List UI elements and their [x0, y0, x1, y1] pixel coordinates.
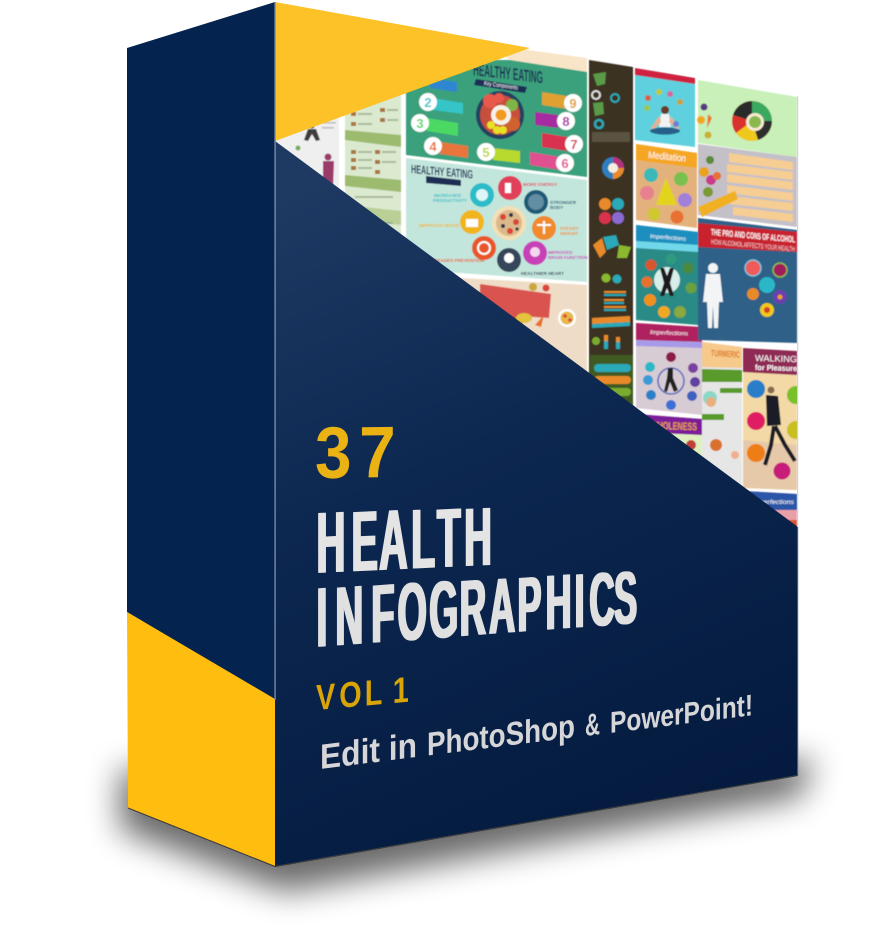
benefit labels: IMPROVED	[548, 250, 573, 255]
subtitle: PhotoShop	[427, 708, 575, 764]
number badges: 6	[561, 156, 569, 171]
panel: fitness sheet	[276, 118, 339, 188]
benefit labels: MORE ENERGY	[523, 182, 557, 187]
subtitle: PowerPoint!	[610, 689, 753, 740]
benefit labels: HEALTHIER HEART	[521, 271, 564, 276]
subtitle: Edit in	[320, 726, 417, 777]
panel: imperfections blue	[748, 490, 797, 526]
panel: food list sheet	[344, 95, 402, 234]
panel: imperfections teal: Imperfections	[650, 234, 686, 243]
number badges: 3	[416, 116, 424, 131]
panel: meditation yoga	[636, 144, 697, 228]
heading: INFOGRAPHICS: P	[518, 559, 541, 649]
heading: HEALTH	[317, 488, 492, 592]
heading: INFOGRAPHICS: I	[317, 570, 327, 666]
benefit labels: STRONGER	[550, 200, 577, 205]
volume label: 1	[393, 669, 409, 711]
body silhouette	[703, 263, 723, 328]
panel: meditation yoga: Meditation	[648, 150, 686, 165]
heading: INFOGRAPHICS: C	[589, 555, 615, 643]
organ icons	[745, 260, 787, 317]
heading: INFOGRAPHICS: I	[575, 557, 584, 644]
panel: healthy eating key components	[406, 60, 587, 177]
pizza	[492, 206, 526, 240]
heading: INFOGRAPHICS: S	[614, 556, 637, 641]
navy front panel	[275, 141, 798, 866]
panel: turmeric	[702, 342, 742, 490]
label tabs	[427, 78, 567, 170]
benefit labels: DISEASES PREVENTION	[430, 258, 485, 263]
subtitle	[320, 689, 753, 777]
panel: imperfections lavender	[636, 323, 702, 415]
bars	[590, 291, 633, 405]
benefit labels: INCREASED	[434, 193, 462, 198]
walking person	[765, 386, 795, 465]
heading: THE PRO AND CONS OF ALCOHOL	[711, 227, 795, 245]
meditating figure	[650, 106, 680, 135]
benefit labels: IMPROVED MOOD	[419, 223, 460, 228]
panel: wholeness: WHOLENESS	[651, 420, 697, 433]
quadrant icons	[599, 198, 624, 224]
heading: INFOGRAPHICS: F	[371, 565, 395, 661]
panel: healthy eating key components: HEALTHY EATING	[473, 60, 543, 87]
panel: dark vertical infographic	[589, 60, 633, 440]
number badges: 5	[482, 145, 490, 160]
panel: turmeric: TURMERIC	[711, 348, 740, 360]
food bowl	[476, 91, 524, 139]
panel: meditation benefits	[635, 68, 695, 147]
panel: walking for pleasure: WALKING	[755, 353, 797, 364]
heading: INFOGRAPHICS: H	[546, 557, 572, 646]
benefit labels: BODY	[550, 205, 563, 210]
volume label: VOL	[316, 671, 382, 718]
number badges: 8	[562, 114, 570, 129]
wheel chart	[602, 157, 624, 179]
panel: walking for pleasure	[742, 347, 797, 490]
number badges: 2	[424, 95, 432, 110]
heading: INFOGRAPHICS: R	[460, 564, 486, 654]
panel: healthy eating right way	[406, 158, 588, 282]
yellow top triangle	[275, 2, 530, 141]
benefit icons	[460, 176, 556, 272]
benefit labels	[419, 182, 588, 276]
heading: HEALTH: H	[464, 490, 492, 584]
panel: healthy eating key components: Key Components	[484, 81, 518, 92]
drop shadow under box	[120, 760, 815, 892]
heading: INFOGRAPHICS: N	[335, 568, 363, 664]
benefit labels: WEIGHT	[560, 231, 579, 236]
heading: INFOGRAPHICS: O	[398, 564, 427, 659]
heading: INFOGRAPHICS: A	[489, 561, 515, 652]
panel: pro and cons of alcohol: HOW ALCOHOL AFFECTS YOUR HEALTH	[711, 239, 795, 254]
panel: red article sheet	[460, 278, 588, 372]
number badges: 9	[569, 96, 577, 111]
heading: HEALTH: A	[379, 492, 408, 589]
box edge highlights	[128, 2, 798, 866]
panel: wholeness	[644, 414, 703, 456]
heading: INFOGRAPHICS	[317, 547, 637, 666]
subtitle: &	[585, 706, 600, 743]
panel: benefits wheel	[697, 80, 797, 157]
thumbnail collage on front face	[276, 50, 797, 526]
heading: HEALTH: T	[437, 490, 461, 585]
panel: imperfections lavender: Imperfections	[650, 330, 688, 338]
heading: HEALTH: H	[317, 495, 345, 592]
benefit labels: STEADY	[560, 226, 579, 231]
number badges	[411, 93, 583, 172]
pentagon icons	[593, 235, 631, 258]
panel: pro and cons of alcohol	[698, 218, 797, 343]
heading: HEALTH: L	[411, 492, 435, 588]
number 37: 37	[315, 411, 396, 494]
benefit labels: PRODUCTIVITY	[433, 198, 467, 203]
panel: vegetables list	[698, 144, 797, 227]
heading: HEALTH: E	[352, 493, 378, 591]
box left side panel	[127, 2, 275, 866]
panel: walking for pleasure: for Pleasure	[755, 363, 797, 373]
heading: INFOGRAPHICS: G	[429, 564, 458, 657]
panel: imperfections teal	[636, 225, 698, 325]
left side yellow block	[127, 612, 275, 866]
panel: beige top sheet	[490, 45, 587, 72]
panel: imperfections blue: Imperfections	[752, 500, 794, 506]
number badges: 4	[429, 139, 437, 154]
benefit labels: BRAIN FUNCTION	[548, 255, 588, 260]
number badges: 7	[570, 137, 578, 152]
heading: HEALTHY EATING	[411, 162, 473, 182]
